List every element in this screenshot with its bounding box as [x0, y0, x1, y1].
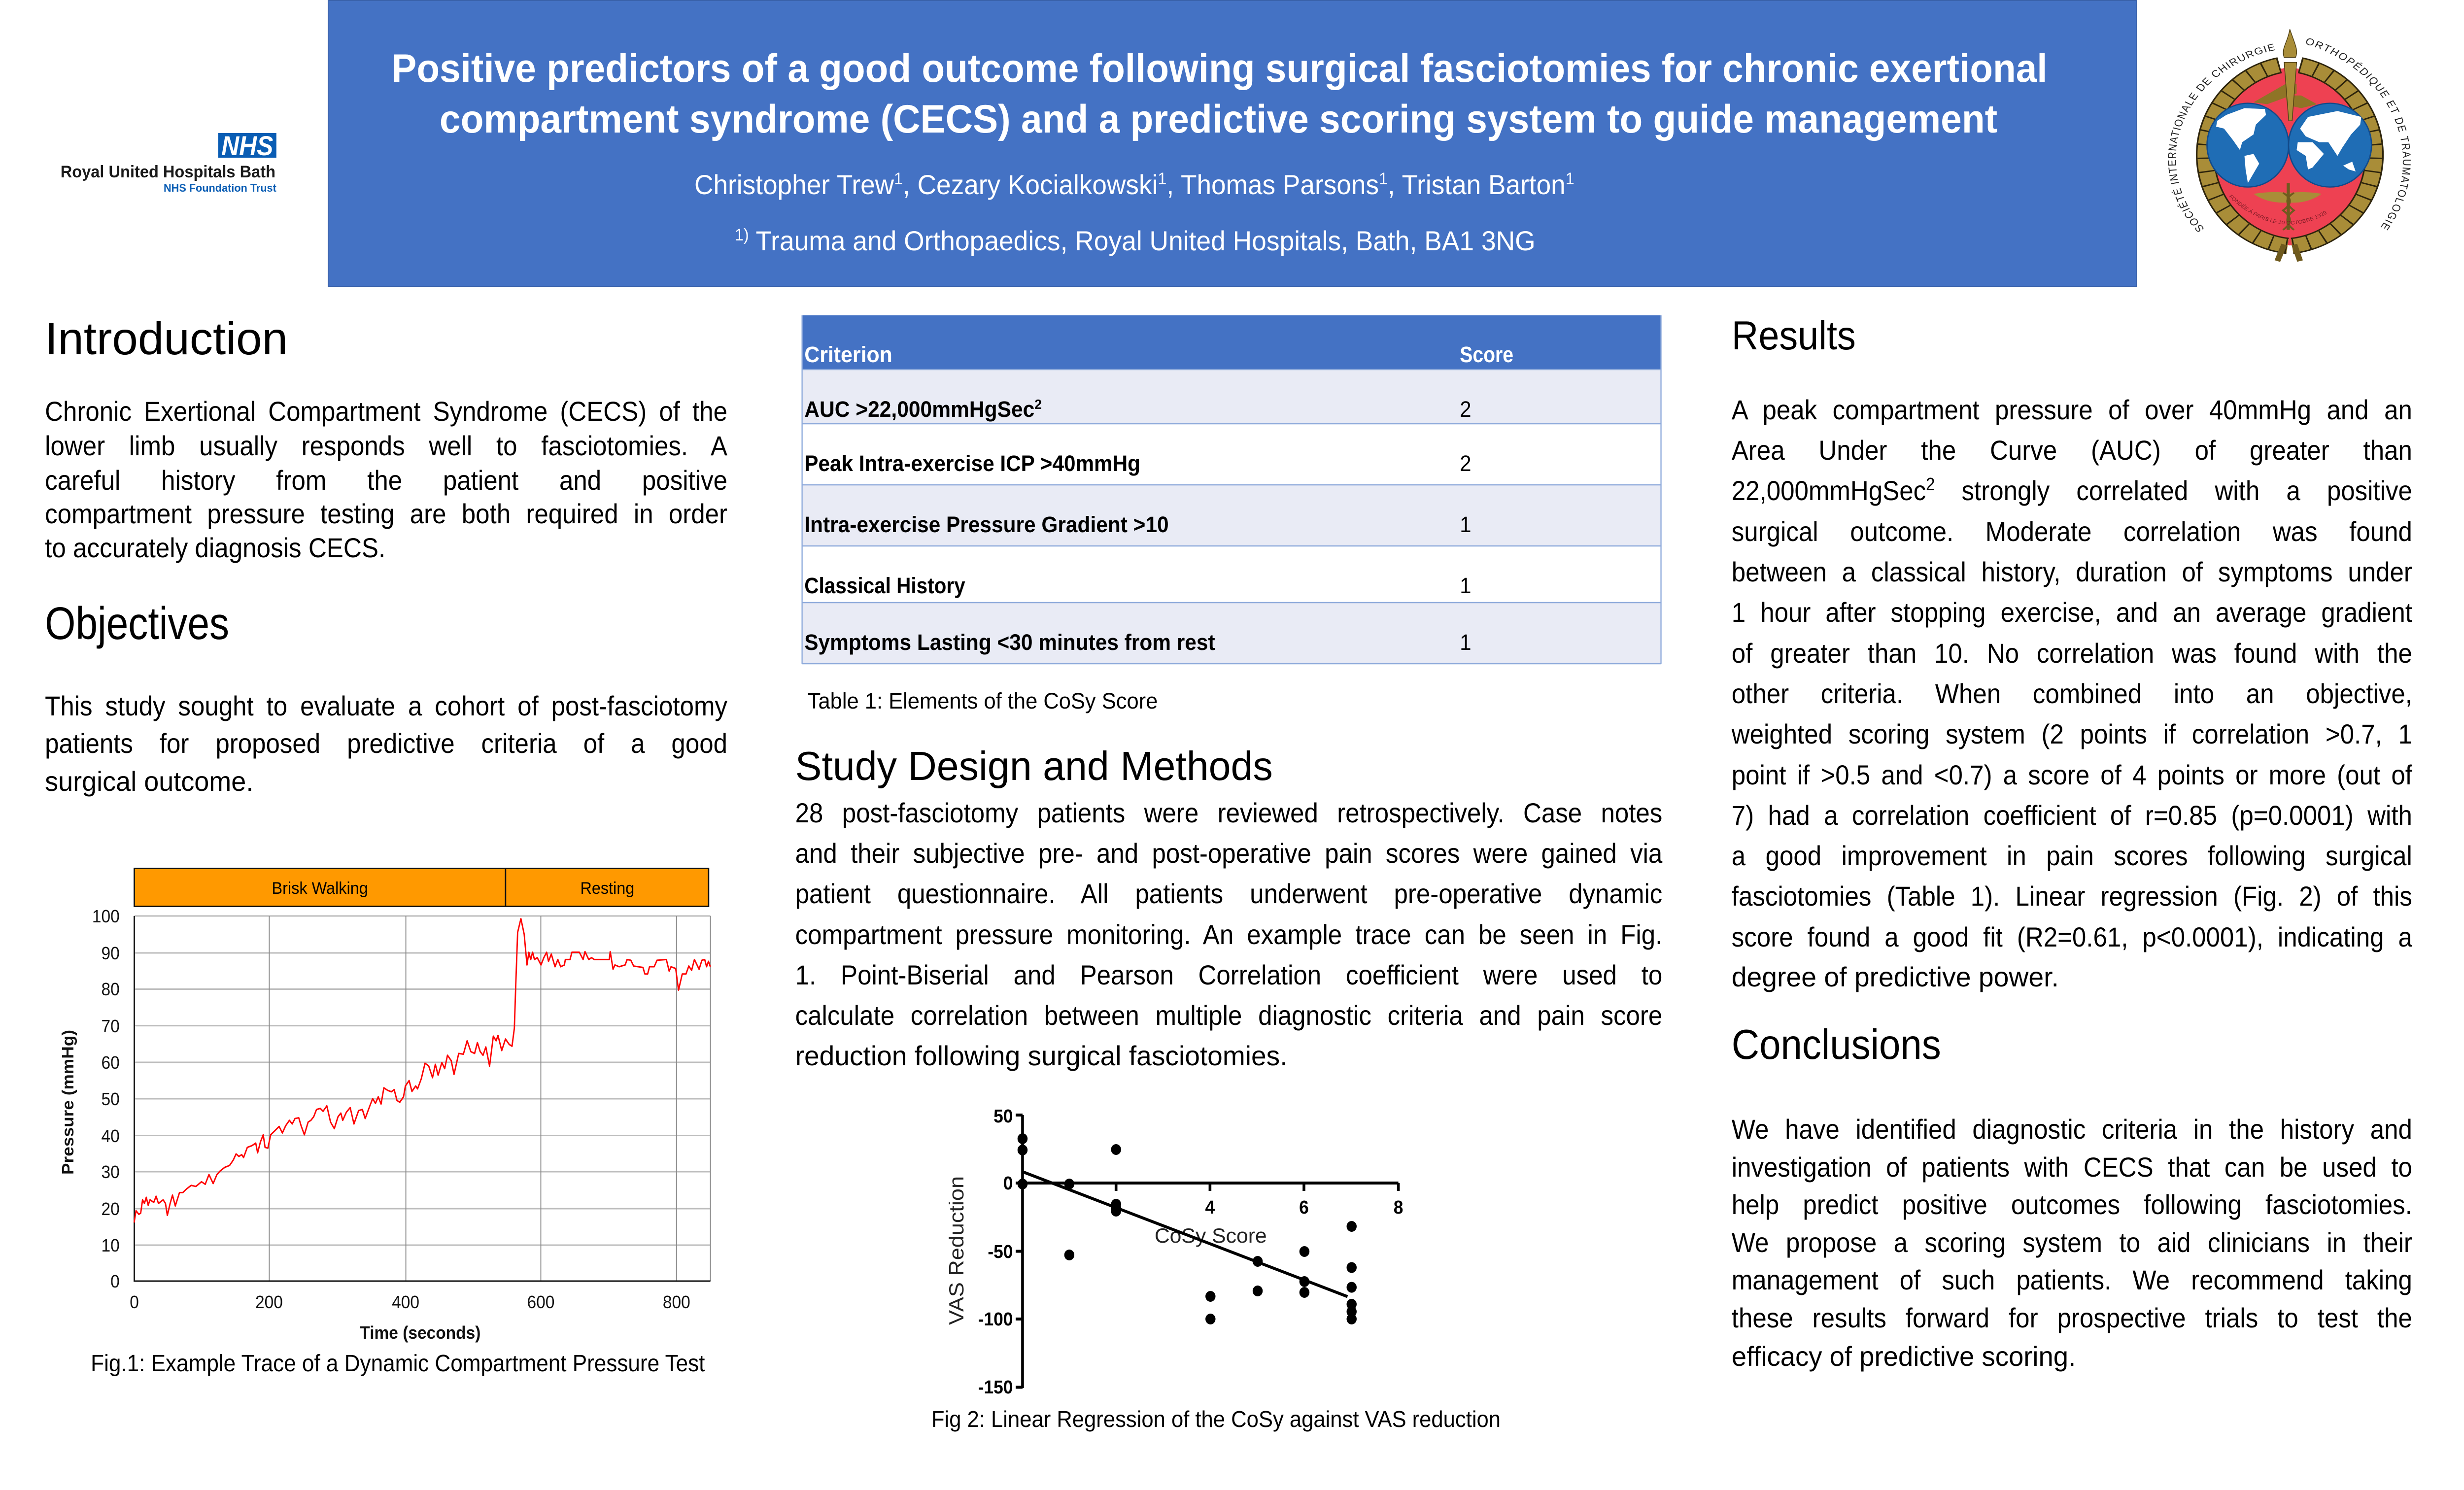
text block: results: between a classical history, duration of symptoms under [1732, 556, 2412, 587]
affiliation: 1) [735, 226, 749, 244]
table header row: Score [1460, 342, 1513, 367]
text block: results: 7) had a correlation coefficient of r=0.85 (p=0.0001) with [1732, 800, 2412, 831]
phase bar: brisk walking and resting [135, 868, 709, 907]
phase bar: brisk walking and resting: Resting [580, 879, 634, 898]
text block: conclusions [1732, 1116, 2412, 1377]
figure caption: Fig 2: Fig 2: Linear Regression of the CoSy against VAS reduction [931, 1407, 1501, 1432]
authors: , Thomas Parsons [1166, 169, 1379, 200]
text block: conclusions: these results forward for prospective trials to test the [1732, 1302, 2412, 1333]
table header row [802, 315, 1661, 370]
table row: classical history: Classical History [804, 573, 965, 598]
y axis labels: 50 [101, 1089, 120, 1109]
table: elements of the CoSy score [801, 314, 1662, 665]
table row: pressure gradient: 1 [1460, 512, 1472, 537]
heading: Conclusions: Conclusions [1732, 1021, 1941, 1068]
table row: peak intra-exercise ICP: 2 [1460, 451, 1472, 476]
text block: results: point if >0.5 and <0.7) a score of 4 points or more (out of [1732, 759, 2412, 790]
text block: objectives: patients for proposed predictive criteria of a good [45, 728, 727, 759]
x axis title: CoSy Score [1155, 1224, 1267, 1247]
axes [1016, 1115, 1399, 1388]
text block: conclusions: help predict positive outcomes following fasciotomies. [1732, 1189, 2412, 1220]
table header row: Criterion [804, 342, 892, 367]
text block: results: surgical outcome. Moderate correlation was found [1732, 516, 2412, 547]
pressure trace [134, 918, 710, 1222]
text block: results: Area Under the Curve (AUC) of greater than [1732, 435, 2412, 466]
text block: results: fasciotomies (Table 1). Linear regression (Fig. 2) of this [1732, 880, 2412, 912]
table caption: Table 1: Elements of the CoSy Score [808, 688, 1158, 713]
text block: study design and methods [795, 799, 1662, 1075]
table row: symptoms lasting [802, 603, 1661, 664]
heading: Study Design and Methods: Study Design and Methods [795, 743, 1273, 789]
authors: 1 [1566, 169, 1574, 188]
table row: classical history [802, 546, 1661, 603]
text block: objectives: This study sought to evaluate a cohort of post-fasciotomy [45, 690, 727, 721]
text block: results: score found a good fit (R2=0.61, p<0.0001), indicating a [1732, 921, 2412, 952]
y axis title: Pressure (mmHg) [58, 1030, 77, 1175]
text block: results: a good improvement in pain scores following surgical [1732, 840, 2412, 871]
text block: conclusions: We propose a scoring system to aid clinicians in their [1732, 1227, 2412, 1258]
x axis labels: 800 [663, 1292, 690, 1312]
x axis labels: 200 [255, 1292, 283, 1312]
y axis labels: 40 [101, 1126, 120, 1146]
authors: 1 [894, 169, 903, 188]
authors: 1 [1379, 169, 1388, 188]
text block: results: of greater than 10. No correlation was found with the [1732, 638, 2412, 669]
y axis tick labels: 0 [1003, 1173, 1013, 1194]
text block: results: A peak compartment pressure of over 40mmHg and an [1732, 394, 2412, 425]
phase bar: brisk walking and resting: Brisk Walking [272, 879, 368, 898]
logo: NHS Royal United Hospitals Bath [57, 131, 279, 197]
y axis labels: 70 [101, 1016, 120, 1036]
text block: results: other criteria. When combined into an objective, [1732, 678, 2412, 709]
logo: NHS Royal United Hospitals Bath: NHS Foundation Trust [164, 182, 276, 194]
x axis labels [130, 1292, 690, 1312]
text block: study design and methods: 1. Point-Biserial and Pearson Correlation coefficient were used to [795, 959, 1662, 990]
logo: NHS Royal United Hospitals Bath: NHS [221, 131, 273, 161]
authors: Christopher Trew [694, 169, 890, 200]
text block: study design and methods: 28 post-fasciotomy patients were reviewed retrospectively. Case notes [795, 797, 1662, 828]
x axis tick labels [1205, 1197, 1403, 1218]
x axis title: Time (seconds) [360, 1322, 480, 1343]
logo: SICOT emblem: FONDÉE À PARIS LE 10 OCTOBRE 1929 [2229, 195, 2327, 225]
text block: introduction: compartment pressure testing are both required in order [45, 498, 727, 529]
line chart: Fig.1 dynamic compartment pressure trace [46, 862, 733, 1348]
y axis tick labels: -100 [978, 1309, 1013, 1330]
text block: introduction [45, 398, 727, 565]
text block: conclusions: management of such patients. We recommend taking [1732, 1264, 2412, 1295]
logo: SICOT emblem: SOCIÉTÉ INTERNATIONALE DE CHIRURGIE [2168, 43, 2276, 232]
authors: , Cezary Kocialkowski [903, 169, 1158, 200]
header banner [328, 0, 2137, 287]
y axis labels: 90 [101, 943, 120, 963]
figure caption: Fig.1: Fig.1: Example Trace of a Dynamic Compartment Pressure Test [91, 1351, 705, 1377]
text block: study design and methods: calculate correlation between multiple diagnostic criteria and pain score [795, 1000, 1662, 1031]
heading: Results: Results [1732, 312, 1856, 358]
table row: pressure gradient: Intra-exercise Pressure Gradient >10 [804, 512, 1169, 537]
logo: SICOT emblem: ORTHOPÉDIQUE ET DE TRAUMATOLOGIE [2306, 38, 2411, 231]
authors [694, 169, 1574, 200]
authors: , Tristan Barton [1388, 169, 1566, 200]
y axis labels: 30 [101, 1162, 120, 1182]
logo: NHS Royal United Hospitals Bath: Royal United Hospitals Bath [61, 163, 275, 181]
table row: peak intra-exercise ICP: Peak Intra-exercise ICP >40mmHg [804, 451, 1140, 476]
y axis tick labels: 50 [993, 1106, 1013, 1127]
logo: SICOT emblem [2154, 20, 2420, 271]
table row: classical history: 1 [1460, 573, 1472, 598]
regression line [1023, 1172, 1347, 1297]
table row: AUC: 2 [1034, 397, 1042, 412]
x axis tick labels: 8 [1394, 1197, 1403, 1218]
y axis tick labels: -150 [978, 1377, 1013, 1398]
y axis labels: 10 [101, 1235, 120, 1255]
text block: study design and methods: compartment pressure monitoring. An example trace can be seen in Fig. [795, 919, 1662, 950]
table row: symptoms lasting: 1 [1460, 630, 1472, 655]
text block: results: 1 hour after stopping exercise, and an average gradient [1732, 597, 2412, 628]
x axis tick labels: 6 [1299, 1197, 1309, 1218]
text block: results: 22,000mmHgSec2 strongly correlated with a positive [1732, 474, 2412, 506]
table row: symptoms lasting: Symptoms Lasting <30 minutes from rest [804, 630, 1215, 655]
y axis tick labels: -50 [988, 1242, 1013, 1262]
data points [1018, 1133, 1357, 1324]
text block: introduction: careful history from the patient and positive [45, 465, 727, 496]
text block: introduction: lower limb usually responds well to fasciotomies. A [45, 430, 727, 461]
y axis labels [92, 906, 120, 1291]
y axis tick labels [978, 1106, 1013, 1398]
table row: AUC: 2 [1460, 397, 1472, 422]
y axis labels: 20 [101, 1199, 120, 1219]
table row: pressure gradient [802, 485, 1661, 546]
y axis labels: 60 [101, 1052, 120, 1073]
text block: conclusions: We have identified diagnostic criteria in the history and [1732, 1114, 2412, 1145]
x axis labels: 400 [392, 1292, 419, 1312]
text block: objectives [45, 692, 727, 801]
scatter chart: Fig 2 CoSy against VAS reduction [949, 1104, 1407, 1399]
table row: peak intra-exercise ICP [802, 424, 1661, 485]
y axis labels: 80 [101, 979, 120, 999]
text block: study design and methods: patient questionnaire. All patients underwent pre-operative dynamic [795, 878, 1662, 909]
x axis labels: 0 [130, 1292, 139, 1312]
y axis labels: 0 [110, 1271, 120, 1291]
title: compartment syndrome (CECS) and a predictive scoring system to guide management [440, 97, 1997, 141]
text block: results: weighted scoring system (2 points if correlation >0.7, 1 [1732, 718, 2412, 749]
table row: AUC: AUC >22,000mmHgSec [804, 397, 1031, 422]
x axis tick labels: 4 [1205, 1197, 1215, 1218]
text block: study design and methods: and their subjective pre- and post-operative pain scores were gained via [795, 838, 1662, 869]
affiliation: Trauma and Orthopaedics, Royal United Hospitals, Bath, BA1 3NG [749, 225, 1536, 256]
y axis labels: 100 [92, 906, 120, 926]
title [391, 46, 2048, 141]
text block: results [1732, 396, 2412, 997]
table row: AUC [802, 370, 1661, 424]
text block: conclusions: investigation of patients with CECS that can be used to [1732, 1151, 2412, 1183]
authors: 1 [1158, 169, 1166, 188]
text block: introduction: Chronic Exertional Compartment Syndrome (CECS) of the [45, 396, 727, 427]
x axis labels: 600 [527, 1292, 554, 1312]
title: Positive predictors of a good outcome following surgical fasciotomies for chronic exertional [391, 46, 2048, 91]
